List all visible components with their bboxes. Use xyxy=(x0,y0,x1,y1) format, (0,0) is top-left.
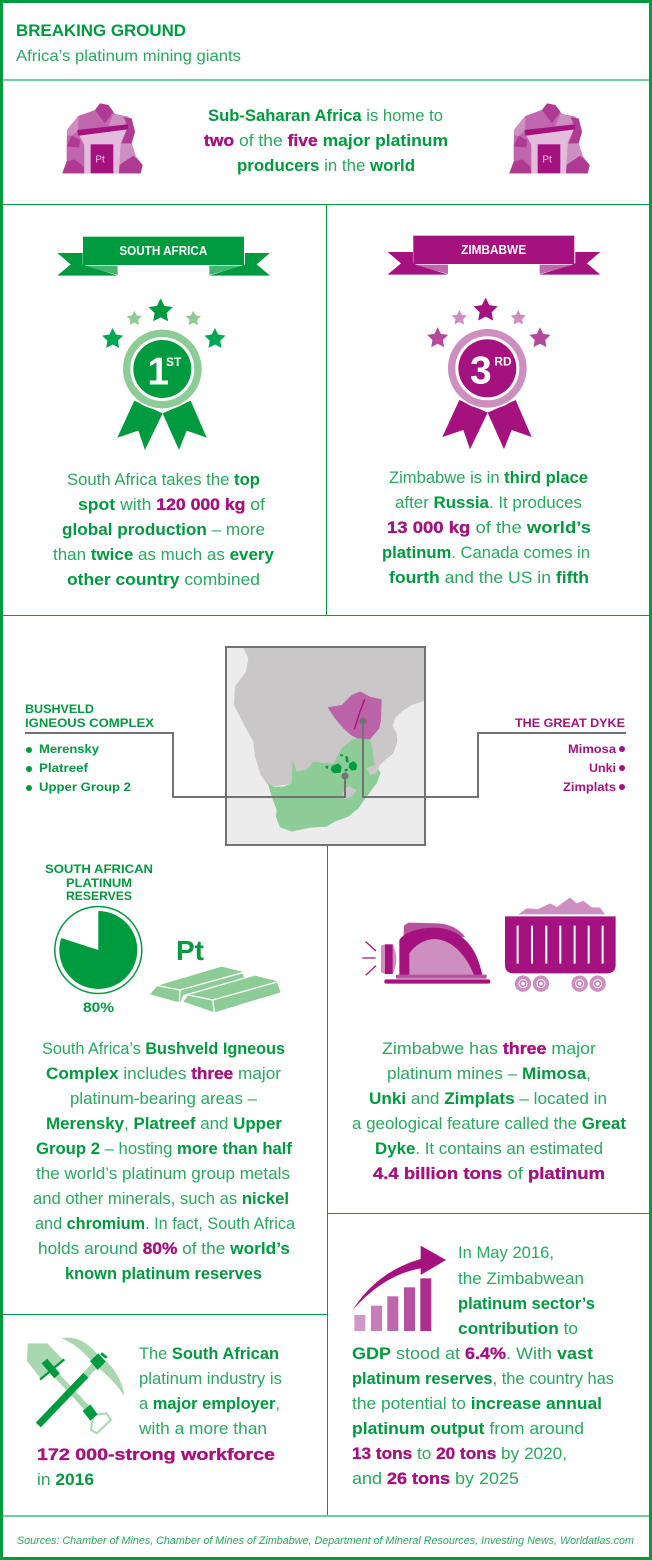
sources: Sources: Chamber of Mines, Chamber of Mines of Zimbabwe, Department of Mineral Resources, Investing News, Worldatlas.com xyxy=(17,1535,634,1547)
medal: third place: 3 xyxy=(470,350,492,393)
GDP text xyxy=(352,1244,614,1488)
GDP text: 13 tons to 20 tons by 2020, xyxy=(352,1445,567,1463)
South African mining text: platinum-bearing areas – xyxy=(70,1090,258,1108)
intro text xyxy=(204,107,448,175)
panel: Zimbabwe ranking xyxy=(382,236,600,587)
pie chart: South African platinum reserves: 80% xyxy=(83,999,115,1015)
legend: Bushveld Igneous Complex: Platreef xyxy=(39,761,89,775)
connector: Bushveld to map xyxy=(25,733,348,797)
South Africa text: South Africa takes the top xyxy=(67,471,260,489)
icon: platinum bars xyxy=(150,935,281,1012)
banner: Zimbabwe xyxy=(388,236,600,275)
legend: The Great Dyke: Unki xyxy=(589,761,616,775)
title xyxy=(16,21,241,65)
banner: South Africa xyxy=(57,237,270,276)
South African mining text: known platinum reserves xyxy=(65,1265,262,1283)
banner: South Africa: SOUTH AFRICA xyxy=(119,244,207,258)
GDP text: GDP stood at 6.4%. With vast xyxy=(352,1345,594,1363)
pie chart: South African platinum reserves xyxy=(45,862,153,1015)
Zimbabwe text: fourth and the US in fifth xyxy=(389,569,589,587)
Zimbabwean mining text: a geological feature called the Great xyxy=(352,1115,627,1133)
workforce text: The South African xyxy=(139,1345,279,1363)
medal: first place: 1 xyxy=(147,350,169,393)
legend: Bushveld Igneous Complex: Upper Group 2 xyxy=(39,780,131,794)
intro text: producers in the world xyxy=(237,157,415,175)
South Africa text: than twice as much as every xyxy=(53,546,275,564)
GDP text: contribution to xyxy=(458,1320,578,1338)
icon: platinum bars: Pt xyxy=(176,935,204,966)
map of southern Africa xyxy=(226,647,425,845)
Zimbabwean mining text: Unki and Zimplats – located in xyxy=(369,1090,607,1108)
workforce text: 172 000-strong workforce xyxy=(37,1446,275,1464)
South Africa text: global production – more xyxy=(62,521,265,539)
South Africa text: other country combined xyxy=(67,571,260,589)
legend: Bushveld Igneous Complex: IGNEOUS COMPLEX xyxy=(25,716,154,730)
Zimbabwean mining text xyxy=(352,1040,627,1183)
icon: rising bar chart with arrow xyxy=(353,1246,446,1331)
workforce text: with a more than xyxy=(138,1420,267,1438)
pie chart: South African platinum reserves: SOUTH AFRICAN xyxy=(45,862,153,876)
workforce text: in 2016 xyxy=(37,1471,94,1489)
South African mining text: South Africa’s Bushveld Igneous xyxy=(42,1040,285,1058)
icon: mine right xyxy=(509,103,590,173)
South African mining text: Complex includes three major xyxy=(46,1065,282,1083)
GDP text: the Zimbabwean xyxy=(458,1270,584,1288)
icon: mine right: Pt xyxy=(542,155,552,166)
icon: ore cart xyxy=(505,898,616,990)
Zimbabwean mining text: Zimbabwe has three major xyxy=(382,1040,597,1058)
legend: The Great Dyke: Mimosa xyxy=(568,742,616,756)
South Africa text xyxy=(53,471,275,589)
GDP text: platinum sector’s xyxy=(458,1295,595,1313)
South African mining text: and other minerals, such as nickel xyxy=(33,1190,289,1208)
Zimbabwe text: platinum. Canada comes in xyxy=(382,544,590,562)
GDP text: platinum output from around xyxy=(352,1420,584,1438)
intro text: Sub-Saharan Africa is home to xyxy=(208,107,443,125)
medal: third place: RD xyxy=(494,354,512,368)
workforce text: a major employer, xyxy=(139,1395,280,1413)
legend: Bushveld Igneous Complex: Merensky xyxy=(39,742,99,756)
South African mining text: holds around 80% of the world’s xyxy=(38,1240,290,1258)
Zimbabwean mining text: Dyke. It contains an estimated xyxy=(375,1140,603,1158)
medal: first place: ST xyxy=(166,355,182,369)
intro text: two of the five major platinum xyxy=(204,132,448,150)
South African mining text: the world’s platinum group metals xyxy=(36,1165,290,1183)
banner: Zimbabwe: ZIMBABWE xyxy=(461,243,526,257)
pie chart: South African platinum reserves: RESERVES xyxy=(66,889,132,903)
title: BREAKING GROUND xyxy=(16,21,186,40)
icon: miner helmet xyxy=(362,923,490,984)
connector: Great Dyke to map xyxy=(360,718,626,797)
workforce text: platinum industry is xyxy=(139,1370,282,1388)
title: Africa’s platinum mining giants xyxy=(16,48,241,65)
South Africa text: spot with 120 000 kg of xyxy=(78,496,265,514)
icon: shovel and pick xyxy=(27,1338,124,1433)
workforce text xyxy=(37,1345,282,1489)
medal: first place xyxy=(102,298,225,450)
GDP text: and 26 tons by 2025 xyxy=(352,1470,519,1488)
pie chart: South African platinum reserves: PLATINUM xyxy=(66,876,132,890)
Zimbabwean mining text: 4.4 billion tons of platinum xyxy=(373,1165,605,1183)
Zimbabwe text: 13 000 kg of the world’s xyxy=(387,519,591,537)
GDP text: In May 2016, xyxy=(458,1244,554,1262)
South African mining text: and chromium. In fact, South Africa xyxy=(35,1215,296,1233)
legend: The Great Dyke xyxy=(515,716,625,794)
icon: mine left xyxy=(62,103,143,173)
Zimbabwe text: Zimbabwe is in third place xyxy=(389,469,588,487)
medal: third place xyxy=(427,298,550,449)
legend: Bushveld Igneous Complex: BUSHVELD xyxy=(25,702,94,716)
panel: South Africa ranking xyxy=(53,237,275,589)
legend: The Great Dyke: Zimplats xyxy=(563,780,616,794)
legend: The Great Dyke: THE GREAT DYKE xyxy=(515,716,625,730)
legend: Bushveld Igneous Complex xyxy=(25,702,154,794)
Zimbabwe text: after Russia. It produces xyxy=(395,494,582,512)
South African mining text xyxy=(33,1040,296,1283)
Zimbabwean mining text: platinum mines – Mimosa, xyxy=(387,1065,591,1083)
South African mining text: Group 2 – hosting more than half xyxy=(36,1140,293,1158)
South African mining text: Merensky, Platreef and Upper xyxy=(46,1115,283,1133)
icon: mine left: Pt xyxy=(95,155,105,166)
Zimbabwe text xyxy=(382,469,591,587)
GDP text: the potential to increase annual xyxy=(352,1395,602,1413)
GDP text: platinum reserves, the country has xyxy=(352,1370,614,1388)
